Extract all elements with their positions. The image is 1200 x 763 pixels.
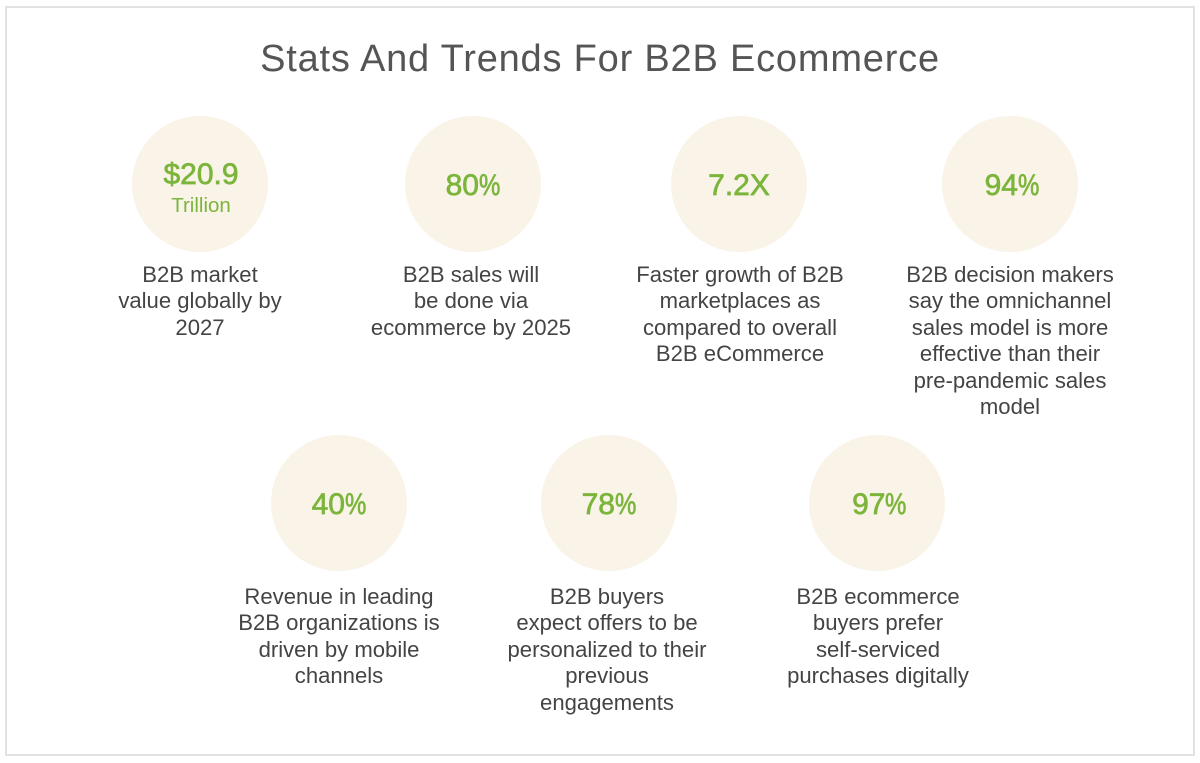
stat: 97% [787, 435, 969, 688]
stat: 94% [906, 116, 1114, 419]
circle: 40%: % [345, 488, 366, 521]
stat: $20.9 Trillion [118, 116, 282, 340]
text: ecommerce sales: ecommerce by 2025 [371, 315, 571, 340]
circle: 94%: % [1018, 169, 1039, 202]
circle: $20.9 Trillion: $20.9 [163, 158, 239, 191]
text: personalized offers [508, 584, 706, 715]
text: market value: B2B market [142, 262, 258, 287]
text: market value [118, 262, 282, 340]
text: personalized offers: personalized to their [508, 637, 706, 662]
stat: 40% [238, 435, 440, 688]
circle: 80%: % [479, 169, 500, 202]
text: personalized offers: previous [565, 663, 649, 688]
text: omnichannel: say the omnichannel [909, 288, 1111, 313]
text: omnichannel: B2B decision makers [906, 262, 1114, 287]
text: marketplace growth: B2B eCommerce [656, 341, 824, 366]
text: self-service: buyers prefer [813, 610, 943, 635]
text: ecommerce sales [371, 262, 571, 340]
text: personalized offers: engagements [540, 690, 674, 715]
text: self-service [787, 584, 969, 688]
stat: 80% [371, 116, 571, 340]
text: marketplace growth: marketplaces as [660, 288, 820, 313]
text: marketplace growth [636, 262, 844, 366]
circle: 78%: 78 [582, 488, 615, 521]
text: omnichannel: sales model is more [912, 315, 1108, 340]
stat: 7.2X [636, 116, 844, 366]
circle: 40% [271, 435, 407, 571]
circle: 78%: % [615, 488, 636, 521]
text: self-service: purchases digitally [787, 663, 969, 688]
text: ecommerce sales: be done via [414, 288, 528, 313]
circle: 94% [942, 116, 1078, 252]
text: personalized offers: B2B buyers [550, 584, 664, 609]
text: mobile revenue: B2B organizations is [238, 610, 440, 635]
circle: 97%: 97 [852, 488, 885, 521]
title: Stats And Trends For B2B Ecommerce [260, 38, 940, 80]
circle: $20.9 Trillion [132, 116, 268, 252]
circle: 7.2X [671, 116, 807, 252]
text: omnichannel: pre-pandemic sales [914, 368, 1106, 393]
circle: 94%: 94 [985, 169, 1018, 202]
text: mobile revenue [238, 584, 440, 688]
text: personalized offers: expect offers to be [516, 610, 698, 635]
circle: 78% [541, 435, 677, 571]
text: marketplace growth: compared to overall [643, 315, 837, 340]
text: market value: 2027 [175, 315, 225, 340]
text: ecommerce sales: B2B sales will [403, 262, 539, 287]
circle: 80% [405, 116, 541, 252]
text: self-service: B2B ecommerce [796, 584, 960, 609]
stat: 78% [508, 435, 706, 715]
text: omnichannel [906, 262, 1114, 419]
circle: 97%: % [885, 488, 907, 521]
circle: 7.2X: 7.2X [708, 169, 770, 202]
text: market value: value globally by [118, 288, 282, 313]
circle: 40%: 40 [312, 488, 345, 521]
text: mobile revenue: Revenue in leading [244, 584, 434, 609]
text: omnichannel: model [980, 394, 1040, 419]
text: marketplace growth: Faster growth of B2B [636, 262, 844, 287]
circle: 80%: 80 [446, 169, 479, 202]
circle: $20.9 Trillion: Trillion [171, 194, 231, 217]
text: mobile revenue: channels [295, 663, 383, 688]
text: omnichannel: effective than their [920, 341, 1100, 366]
text: self-service: self-serviced [816, 637, 940, 662]
circle: 97% [809, 435, 945, 571]
text: mobile revenue: driven by mobile [259, 637, 419, 662]
